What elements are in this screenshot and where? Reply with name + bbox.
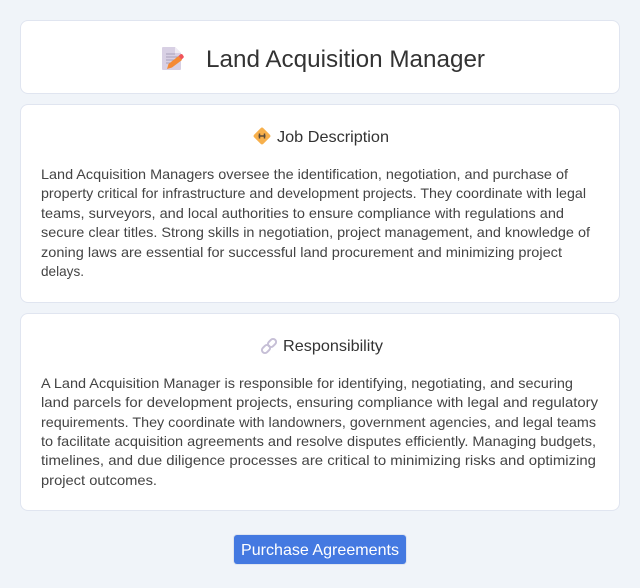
panel: responsibility: [20, 313, 620, 511]
icon: document with pencil: [162, 47, 184, 70]
text block: job description: secure clear titles. Strong skills in negotiation, project management, and knowledge of: [41, 224, 590, 240]
text block: responsibility: requirements. They coordinate with landowners, government agencies, and legal teams: [41, 414, 596, 430]
text block: job description: [41, 166, 590, 279]
panel: title: [20, 20, 620, 94]
text block: job description: teams, surveyors, and local authorities to ensure compliance with regulations and: [41, 205, 564, 221]
text block: job description: delays.: [41, 263, 84, 279]
heading: job description: Job Description: [277, 129, 389, 146]
text block: responsibility: project outcomes.: [41, 472, 157, 488]
text block: job description: Land Acquisition Managers oversee the identification, negotiation, and purchase of: [41, 166, 568, 182]
text block: job description: property critical for infrastructure and development projects. They coordinate with legal: [41, 185, 586, 201]
icon: road work diamond: [253, 127, 271, 145]
button label: Purchase Agreements: [241, 542, 399, 559]
text block: job description: zoning laws are essential for successful land procurement and minimizing project: [41, 244, 562, 260]
text block: responsibility: [41, 375, 598, 488]
purchase agreements button: [234, 535, 406, 564]
heading: responsibility: Responsibility: [283, 338, 383, 355]
text block: responsibility: timelines, and due diligence processes are critical to minimizing risks and optimizing: [41, 452, 596, 468]
icon: chain link: [261, 338, 277, 354]
title: Land Acquisition Manager: [206, 46, 485, 73]
text block: responsibility: A Land Acquisition Manager is responsible for identifying, negotiating, and securing: [41, 375, 573, 391]
text block: responsibility: land parcels for development projects, ensuring compliance with legal and regulatory: [41, 394, 598, 410]
panel: job description: [20, 104, 620, 303]
text block: responsibility: to facilitate acquisition agreements and resolve disputes efficiently. Managing budgets,: [41, 433, 596, 449]
